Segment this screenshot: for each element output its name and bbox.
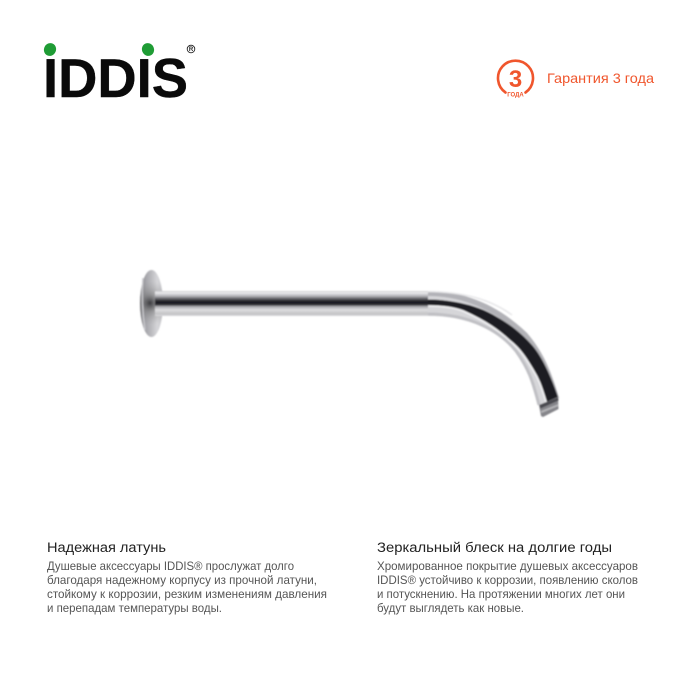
- body: mirror shine: Хромированное покрытие душевых аксессуаров: [377, 559, 638, 573]
- wall flange: [140, 270, 163, 337]
- body: mirror shine: [377, 559, 638, 615]
- body: mirror shine: будут выглядеть как новые.: [377, 601, 524, 615]
- threaded nozzle: [539, 397, 558, 417]
- logo registered mark: R: [189, 47, 194, 53]
- body: brass: Душевые аксессуары IDDIS® прослужат долго: [47, 559, 294, 573]
- logo green dot left: [42, 41, 58, 58]
- body: brass: и перепадам температуры воды.: [47, 601, 222, 615]
- body: brass: стойкому к коррозии, резким изменениям давления: [47, 587, 327, 601]
- product: shower arm: [140, 270, 559, 417]
- logo: IDDIS: [42, 41, 195, 109]
- body: brass: благодаря надежному корпусу из прочной латуни,: [47, 573, 317, 587]
- warranty icon: [498, 61, 533, 98]
- warranty badge: [498, 61, 654, 98]
- logo green dot right: [140, 41, 156, 58]
- body: mirror shine: и потускнению. На протяжении многих лет они: [377, 587, 625, 601]
- heading: brass: Надежная латунь: [47, 540, 166, 555]
- curved tube: [428, 291, 559, 406]
- logo registered mark: [187, 45, 195, 53]
- warranty text: Гарантия 3 года: [547, 70, 654, 86]
- warranty icon: ГОДА: [507, 92, 524, 98]
- straight tube: [155, 291, 429, 316]
- body: mirror shine: IDDIS® устойчиво к коррозии, появлению сколов: [377, 573, 638, 587]
- warranty icon: 3: [509, 66, 522, 93]
- text block: mirror shine: [377, 540, 638, 615]
- logo wordmark: IDDIS: [43, 47, 188, 109]
- body: brass: [47, 559, 327, 615]
- text block: brass: [47, 540, 327, 615]
- heading: mirror shine: Зеркальный блеск на долгие годы: [377, 540, 612, 555]
